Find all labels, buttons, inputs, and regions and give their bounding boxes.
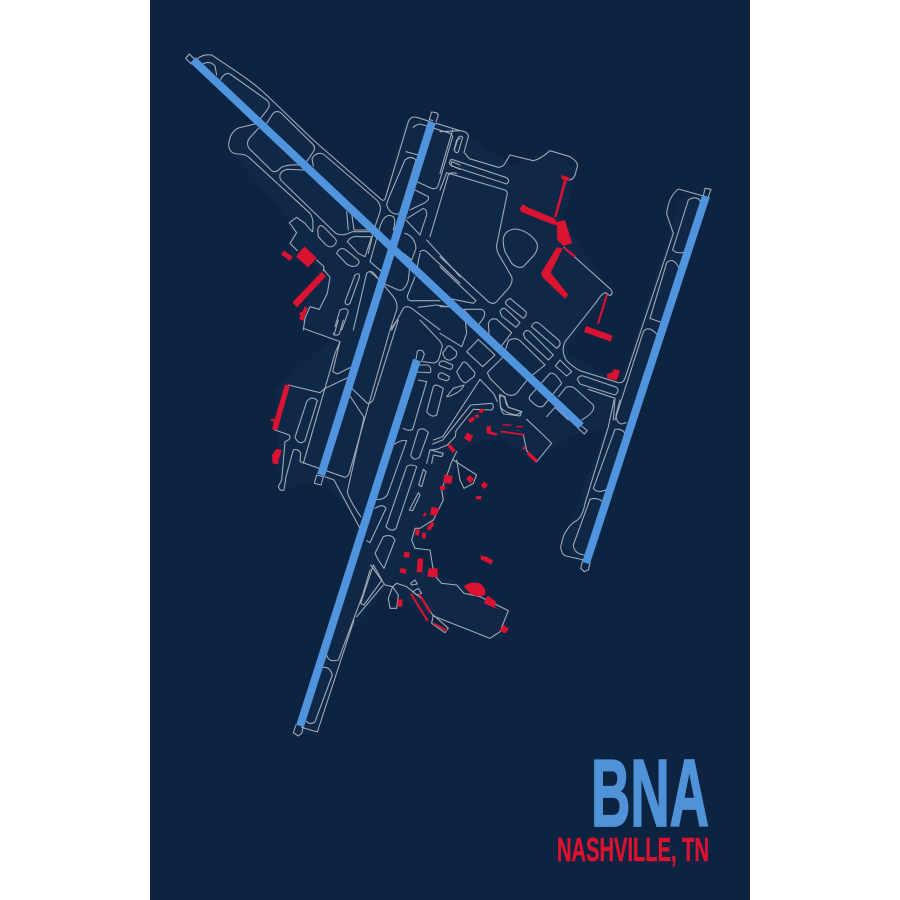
taxiway outlines: terminal and east area (440, 130, 711, 420)
runway east (586, 196, 706, 563)
taxiway outlines: south runway end (293, 570, 370, 736)
runways (193, 60, 706, 726)
taxiway outlines: east runway south end (561, 400, 626, 572)
building: west cargo (281, 246, 326, 321)
city label: NASHVILLE, TN (557, 831, 709, 868)
building: southern hangars (271, 385, 538, 633)
poster background panel (150, 0, 750, 900)
runway centre (321, 122, 432, 475)
taxiway outlines: central junction (403, 320, 475, 430)
taxiway outlines: southern area (275, 320, 552, 638)
taxiway outlines: northwest area (186, 54, 460, 330)
building: main terminal concourses (520, 175, 576, 299)
building: east cargo (584, 294, 620, 381)
runway northwest diagonal (193, 60, 581, 426)
airport code heading: BNA (591, 740, 709, 847)
red terminal and airport buildings (271, 175, 620, 633)
airfield apron fill (195, 55, 705, 735)
runway south (300, 360, 417, 726)
